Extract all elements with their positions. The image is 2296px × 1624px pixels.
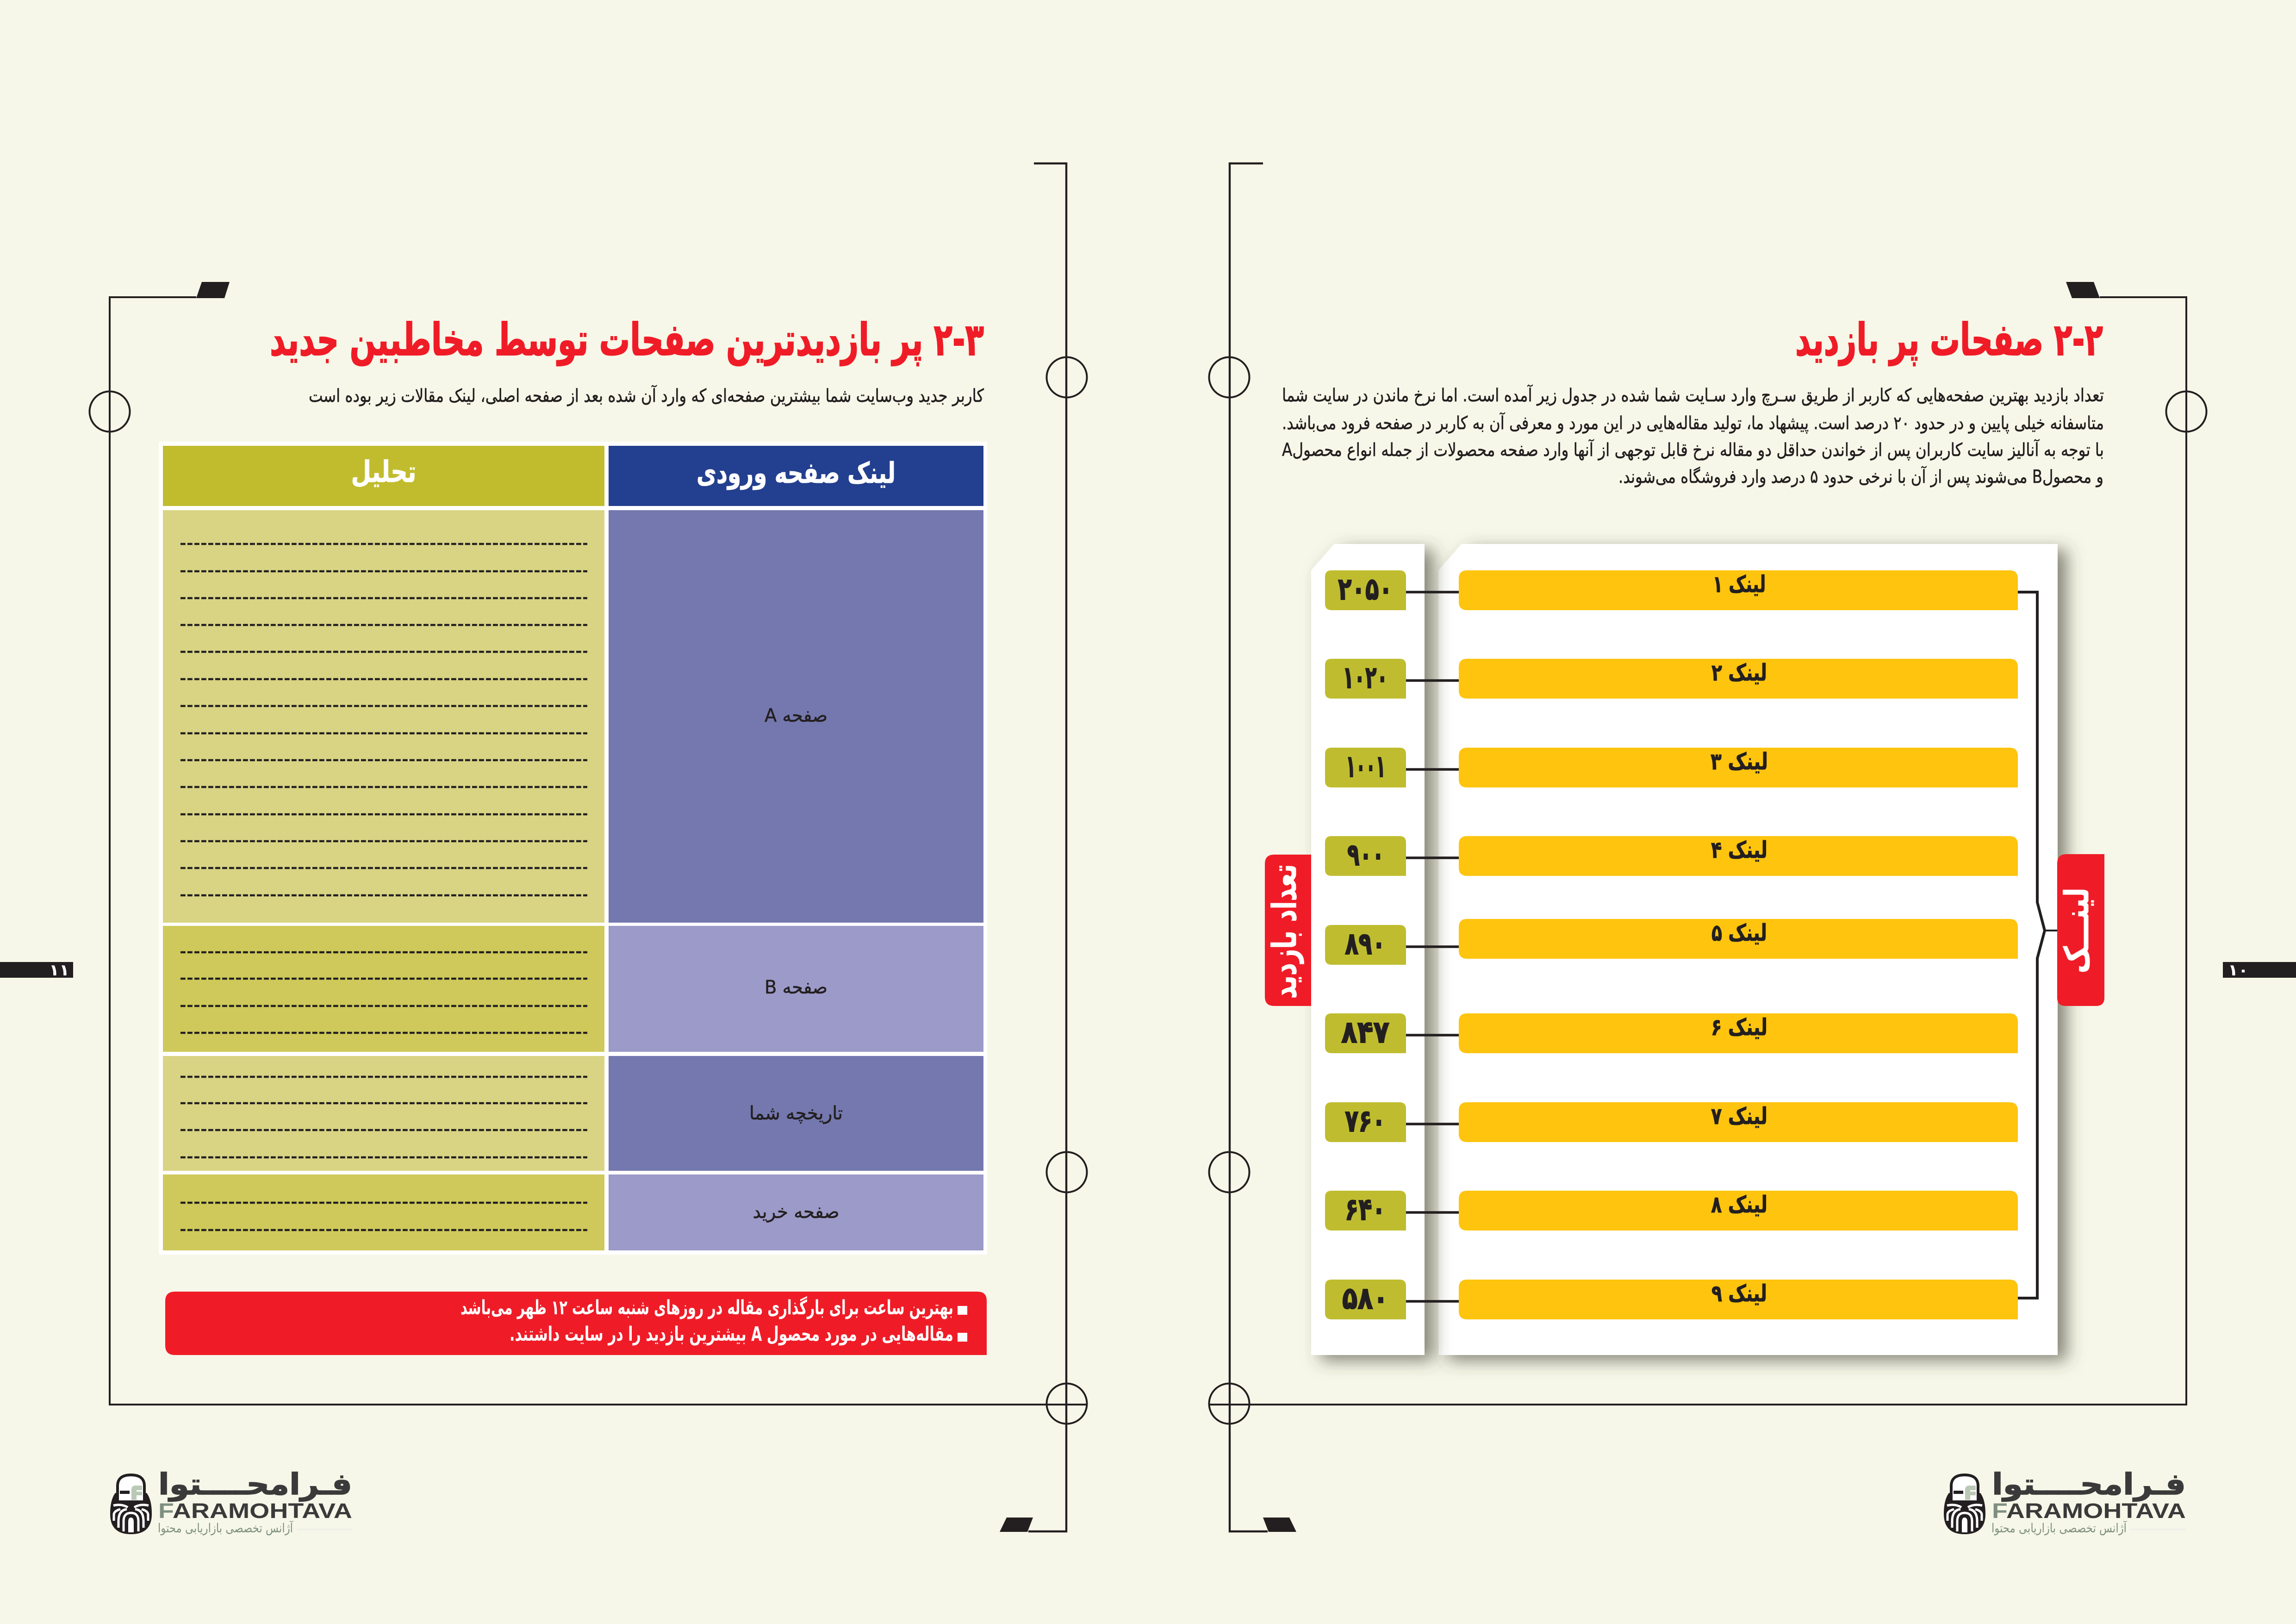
logo: right page: آژانس تخصصی بازاریابی محتوا — [1991, 1521, 2127, 1536]
heading: section 2-3: ۲-۳ پر بازدیدترین صفحات توسط مخاطبین جدید — [270, 314, 984, 366]
heading: section 2-2: ۲-۲ صفحات پر بازدید — [1795, 314, 2103, 366]
row 3: ۱۰۰۱ — [1346, 749, 1386, 784]
tab: visit count label — [1265, 855, 1311, 1006]
row 6 — [1325, 1013, 2018, 1053]
logo: left page: فـرامحــــتوا — [158, 1468, 352, 1502]
row 5: ۸۹۰ — [1345, 926, 1386, 962]
table row: purchase page — [163, 1174, 983, 1250]
callout: key findings: بهترین ساعت برای بارگذاری مقاله در روزهای شنبه ساعت ۱۲ ظهر می‌باشد — [460, 1296, 953, 1319]
table row: your history — [163, 1056, 983, 1171]
left page frame — [90, 163, 1087, 1532]
row 3: لینک ۳ — [1711, 748, 1768, 775]
row 6: ۸۴۷ — [1341, 1014, 1389, 1050]
right page frame — [1209, 163, 2207, 1532]
logo: right page: فـرامحــــتوا — [1992, 1468, 2186, 1502]
row 8: ۶۴۰ — [1345, 1192, 1386, 1227]
table: landing pages and analysis — [159, 442, 987, 1255]
page number 11 — [0, 961, 73, 980]
row 4: لینک ۴ — [1711, 837, 1767, 863]
tab: link label — [2057, 854, 2104, 1006]
row 3 — [1325, 748, 2018, 787]
table row: page A — [163, 510, 983, 923]
row 9: لینک ۹ — [1711, 1280, 1767, 1307]
row 6: لینک ۶ — [1711, 1014, 1767, 1041]
row 2: ۱۰۲۰ — [1343, 660, 1388, 695]
panel: links — [1438, 544, 2058, 1355]
row 9 — [1325, 1280, 2018, 1319]
row 1: لینک ۱ — [1712, 571, 1766, 598]
text block: section 2-2 description: تعداد بازدید بهترین صفحه‌هایی که کاربر از طریق سـرچ وارد سـایت شما شده در جدول زیر آمده است. اما نرخ ماندن در سایت شما — [1282, 384, 2104, 406]
page number 10 — [2223, 961, 2296, 980]
row 5: لینک ۵ — [1711, 919, 1767, 946]
text block: section 2-2 description: متاسفانه خیلی پایین و در حدود ۲۰ درصد است. پیشهاد ما، تولید مقاله‌هایی در این مورد و معرفی آن به کاربر در صفحه فرود می‌باشد. — [1282, 412, 2104, 434]
row 8 — [1325, 1191, 2018, 1230]
table header: analysis — [163, 446, 604, 506]
table row: page B: صفحه B — [765, 977, 828, 998]
table header: entry page link — [609, 446, 983, 506]
callout: key findings — [165, 1292, 987, 1355]
tab: link label: لینـــک — [2057, 888, 2096, 973]
row 1: ۲۰۵۰ — [1338, 571, 1393, 607]
row 5 — [1325, 919, 2018, 965]
row 7: لینک ۷ — [1711, 1103, 1767, 1130]
logo: left page — [110, 1468, 352, 1536]
text block: section 2-2 description: با توجه به آنالیز سایت کاربران پس از خواندن حداقل دو مقاله نرخ قابل توجهی از آنها وارد صفحه محصولات از جمله انواع محصولA — [1282, 439, 2104, 461]
row 4 — [1325, 836, 2018, 876]
logo: left page: آژانس تخصصی بازاریابی محتوا — [158, 1521, 293, 1536]
connector lines — [1406, 592, 1459, 1301]
table row: page A: صفحه A — [765, 705, 828, 726]
row 8: لینک ۸ — [1711, 1191, 1767, 1218]
callout: key findings: مقاله‌هایی در مورد محصول A بیشترین بازدید را در سایت داشتند. — [510, 1323, 953, 1346]
table header: analysis: تحلیل — [351, 455, 417, 489]
logo: right page: FARAMOHTAVA — [1992, 1499, 2186, 1523]
row 9: ۵۸۰ — [1342, 1280, 1388, 1316]
row 2 — [1325, 659, 2018, 699]
logo: right page — [1944, 1468, 2186, 1536]
row 4: ۹۰۰ — [1347, 837, 1384, 873]
table header: entry page link: لینک صفحه ورودی — [697, 456, 896, 490]
page number 10: ۱۰ — [2228, 961, 2248, 980]
table row: your history: تاریخچه شما — [749, 1103, 843, 1124]
row 7 — [1325, 1102, 2018, 1142]
row 2: لینک ۲ — [1711, 659, 1767, 686]
logo: left page: FARAMOHTAVA — [158, 1499, 352, 1523]
table row: page B — [163, 926, 983, 1052]
tab: visit count label: تعداد بازدید — [1265, 864, 1304, 999]
text block: section 2-3 intro: کاربر جدید وب‌سایت شما بیشترین صفحه‌ای که وارد آن شده بعد از صفحه اصلی، لینک مقالات زیر بوده است — [309, 385, 984, 406]
row 7: ۷۶۰ — [1345, 1103, 1386, 1139]
row 1 — [1325, 570, 2018, 610]
page number 11: ۱۱ — [49, 961, 69, 980]
text block: section 2-2 description: و محصولB می‌شوند پس از آن با نرخی حدود ۵ درصد وارد فروشگاه می‌شوند. — [1618, 466, 2103, 487]
panel: visit counts — [1311, 544, 1425, 1355]
bracket connector — [2018, 592, 2057, 1298]
text block: section 2-2 description — [1282, 384, 2104, 487]
table row: purchase page: صفحه خرید — [753, 1201, 840, 1223]
